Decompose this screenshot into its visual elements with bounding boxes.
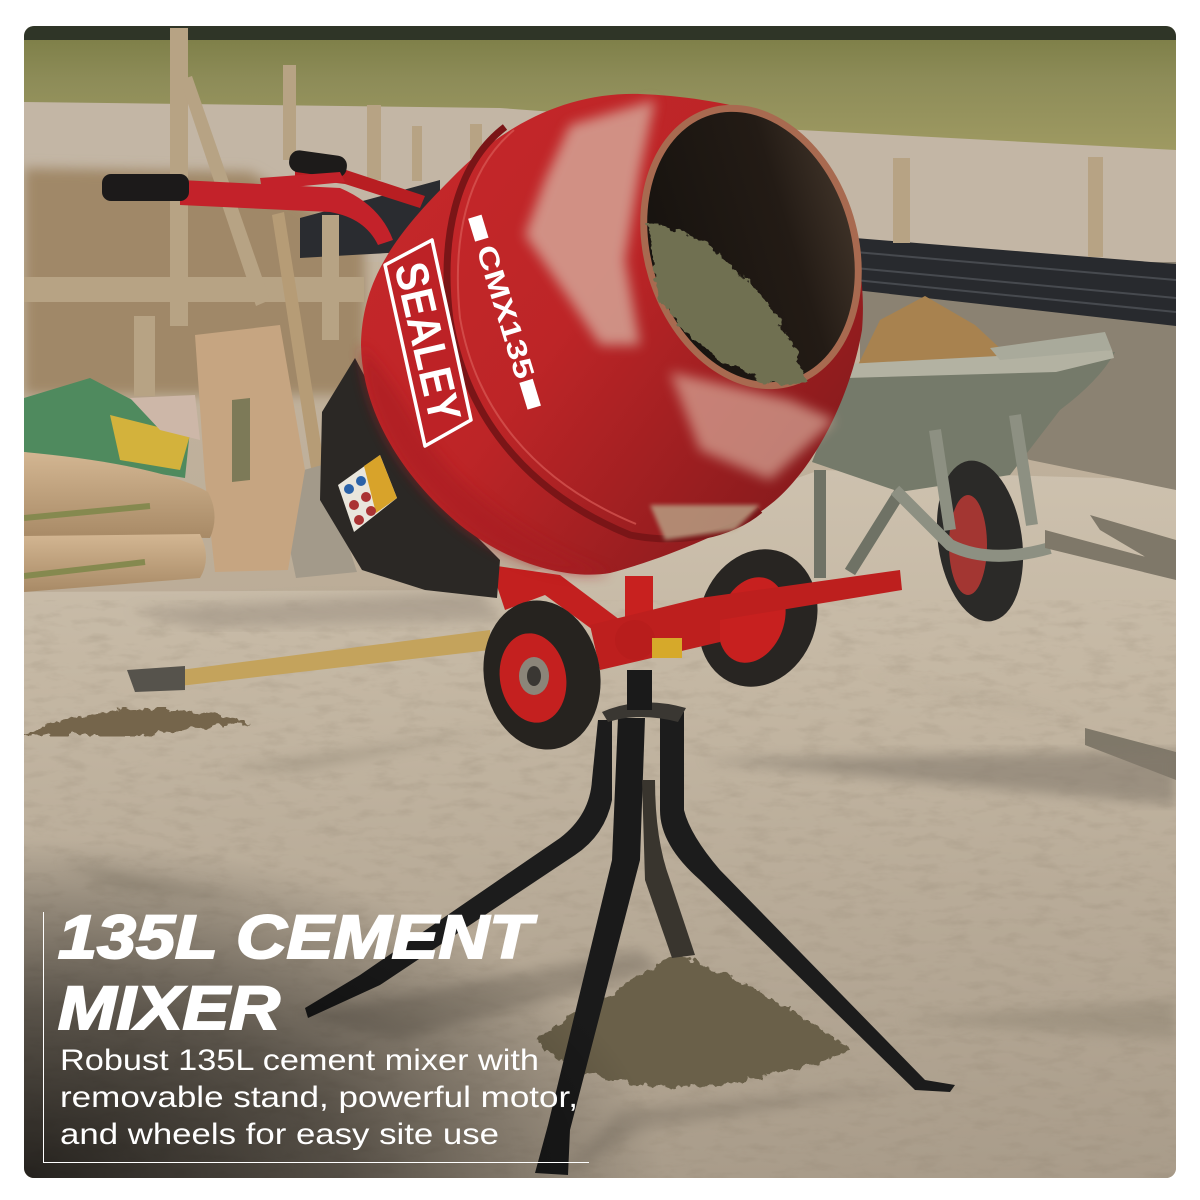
dirt bank [24,168,365,395]
stacked black pipes [300,180,1176,326]
grass field [24,40,1176,152]
stacked cement sacks [24,452,215,592]
drum seam [447,127,760,539]
frame lines [44,912,589,1162]
worn paint patches [525,100,655,345]
model label: CMX135 [470,241,540,382]
sand pile in barrow [858,296,998,364]
mixer drum [361,77,896,575]
planks right [1045,515,1176,780]
coloured bags [24,378,190,478]
dark lower body shading [361,345,610,575]
mallet handle on the ground [127,630,490,692]
motor housing [320,358,500,598]
title [58,903,537,1042]
SEALEY badge: SEALEY [384,257,472,427]
description: removable stand, powerful motor, [60,1081,578,1114]
fence posts [24,28,1103,396]
drum mouth [640,104,862,390]
cement sack: upright [195,325,305,572]
ground shadows and dirt [24,590,1176,1178]
description: and wheels for easy site use [60,1118,499,1151]
title: MIXER [58,974,280,1042]
title: 135L CEMENT [58,903,537,971]
concrete pile [535,955,850,1087]
handle bars [102,149,425,245]
wheelbarrow [812,332,1115,627]
concrete in drum [645,225,806,384]
model label [468,214,541,410]
concrete slab [24,470,1176,1178]
warning sticker [338,455,397,532]
rear wheel [701,549,818,687]
mixer stand [305,670,955,1175]
title block [44,903,589,1162]
bottom-left dark overlay [24,854,632,1178]
description: Robust 135L cement mixer with [60,1044,539,1077]
red frame and tow handle [490,565,902,670]
dark tree line [24,26,1176,41]
shovel [272,212,357,578]
front wheel [483,600,601,750]
description [60,1044,578,1151]
